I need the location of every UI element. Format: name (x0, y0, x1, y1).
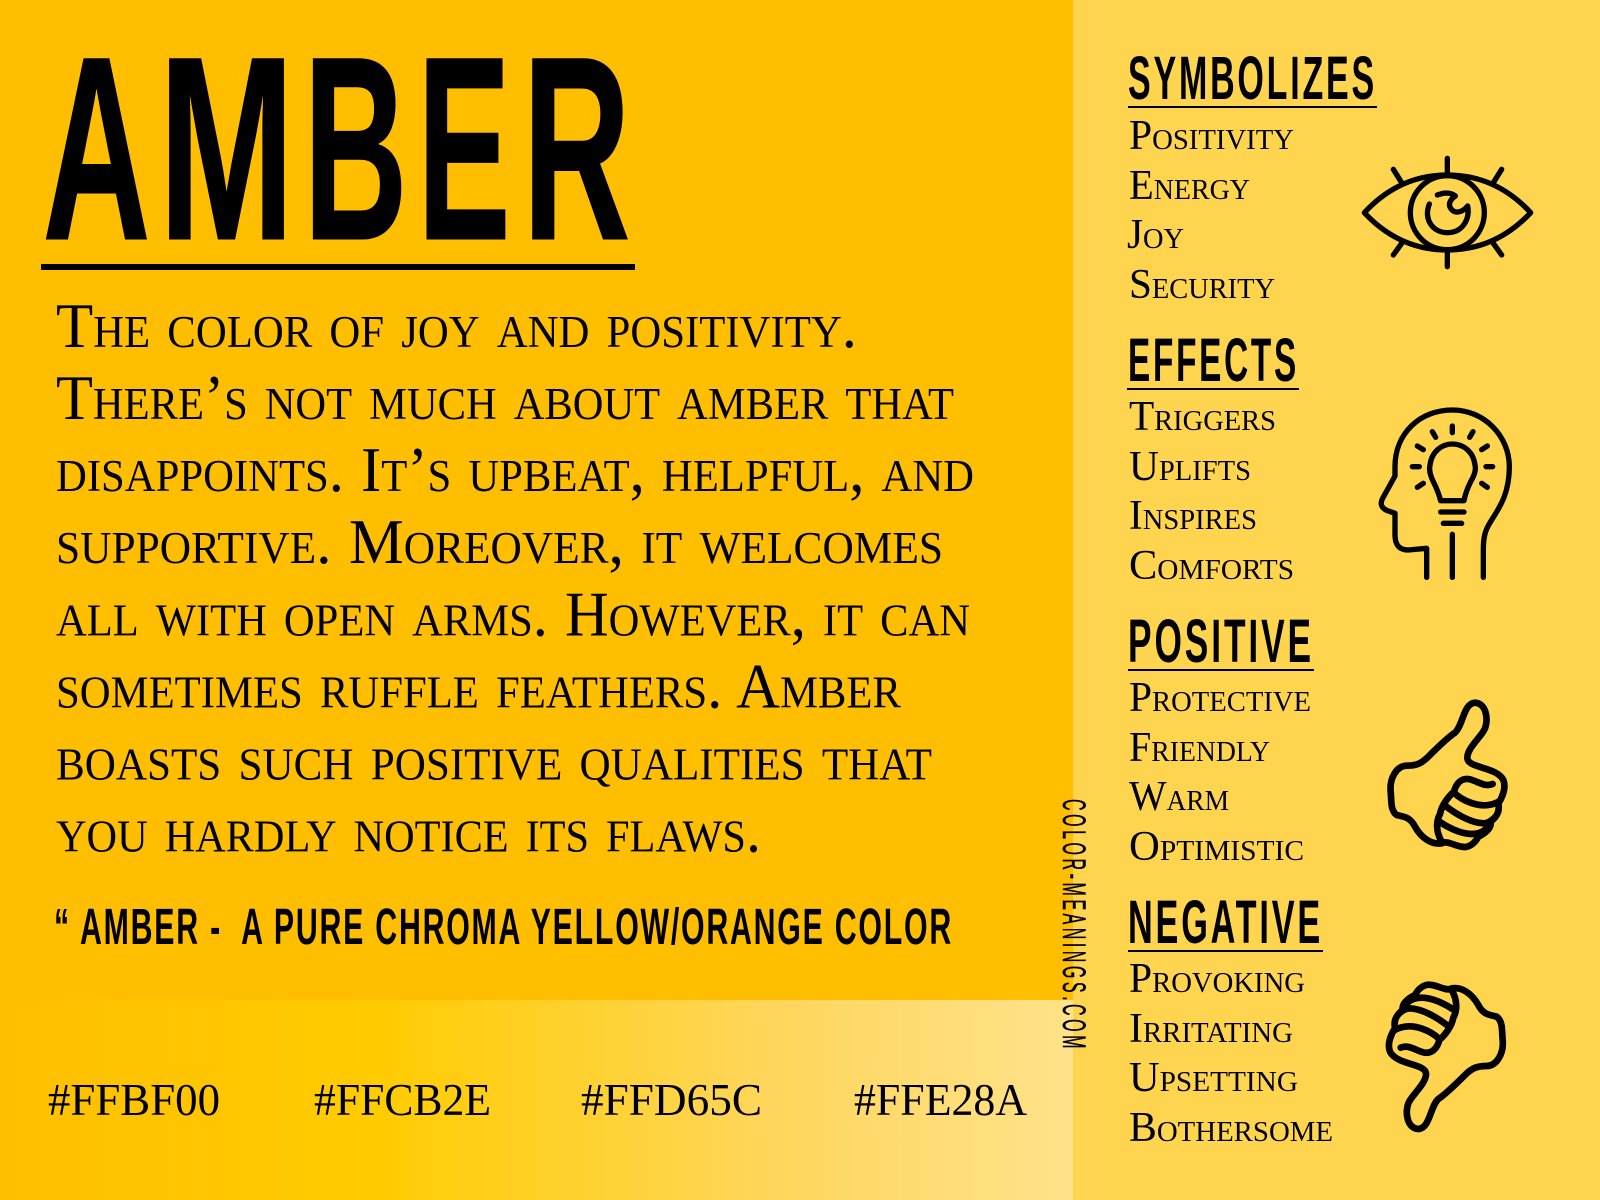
list: positive items: Friendly (1129, 725, 1270, 771)
title: M (158, 2, 294, 295)
heading: negative: NEGATIVE (1128, 888, 1323, 956)
icon: thumbs down (1389, 985, 1503, 1129)
hex code labels: #FFD65C (581, 1075, 762, 1125)
list: negative items (1129, 956, 1333, 1151)
icon: head with light bulb (1381, 410, 1509, 577)
tagline: “ AMBER - A PURE CHROMA YELLOW/ORANGE COLOR (54, 898, 953, 955)
list: negative items: Bothersome (1129, 1105, 1333, 1151)
list: negative items: Upsetting (1129, 1055, 1298, 1101)
heading: positive: POSITIVE (1128, 607, 1314, 675)
title: A (42, 2, 150, 295)
hex code labels: #FFE28A (854, 1075, 1027, 1125)
list: effects items: Triggers (1129, 394, 1276, 440)
list: effects items: Uplifts (1129, 444, 1251, 490)
text block: description: The color of joy and positivity. (56, 290, 857, 361)
panel: sidebar background (1073, 0, 1600, 1200)
list: effects items (1129, 394, 1294, 589)
hex code labels (48, 1075, 1027, 1125)
title (41, 2, 635, 295)
panel: effects list (1127, 326, 1299, 589)
list: positive items (1129, 675, 1311, 870)
list: symbolizes items: Positivity (1129, 113, 1294, 159)
text block: description: sometimes ruffle feathers. Amber (56, 650, 901, 722)
list: symbolizes items: Security (1129, 262, 1275, 308)
list: symbolizes items: Joy (1127, 212, 1184, 258)
hex code labels: #FFCB2E (314, 1075, 491, 1125)
icon: eye (1364, 158, 1531, 267)
list: symbolizes items: Energy (1129, 163, 1250, 209)
list: negative items: Provoking (1129, 956, 1305, 1002)
panel: symbolizes list (1127, 44, 1377, 308)
list: effects items: Comforts (1129, 543, 1294, 589)
list: positive items: Optimistic (1129, 824, 1304, 870)
hex code labels: #FFBF00 (48, 1075, 220, 1125)
icon: thumbs up (1391, 703, 1504, 847)
title: B (304, 2, 408, 295)
panel: gradient colour strip (0, 1000, 1073, 1200)
text block: description: There’s not much about amber that (56, 362, 954, 433)
list: negative items: Irritating (1129, 1006, 1293, 1052)
text block: description: boasts such positive qualities that (56, 722, 932, 794)
title: R (522, 2, 630, 295)
text block: description: you hardly notice its flaws. (56, 794, 761, 866)
list: effects items: Inspires (1129, 493, 1257, 539)
list: positive items: Protective (1129, 675, 1311, 721)
list: positive items: Warm (1129, 774, 1229, 820)
panel: positive list (1128, 607, 1314, 870)
heading: effects: EFFECTS (1128, 326, 1299, 394)
text block: description (56, 290, 974, 866)
title: E (418, 2, 510, 295)
text block: description: disappoints. It’s upbeat, helpful, and (56, 434, 974, 505)
panel: main amber background (0, 0, 1073, 1200)
list: symbolizes items (1127, 113, 1294, 308)
heading: symbolizes: SYMBOLIZES (1128, 44, 1377, 112)
text block: description: supportive. Moreover, it welcomes (56, 506, 943, 577)
panel: negative list (1128, 888, 1333, 1151)
text block: description: all with open arms. However, it can (56, 578, 970, 650)
